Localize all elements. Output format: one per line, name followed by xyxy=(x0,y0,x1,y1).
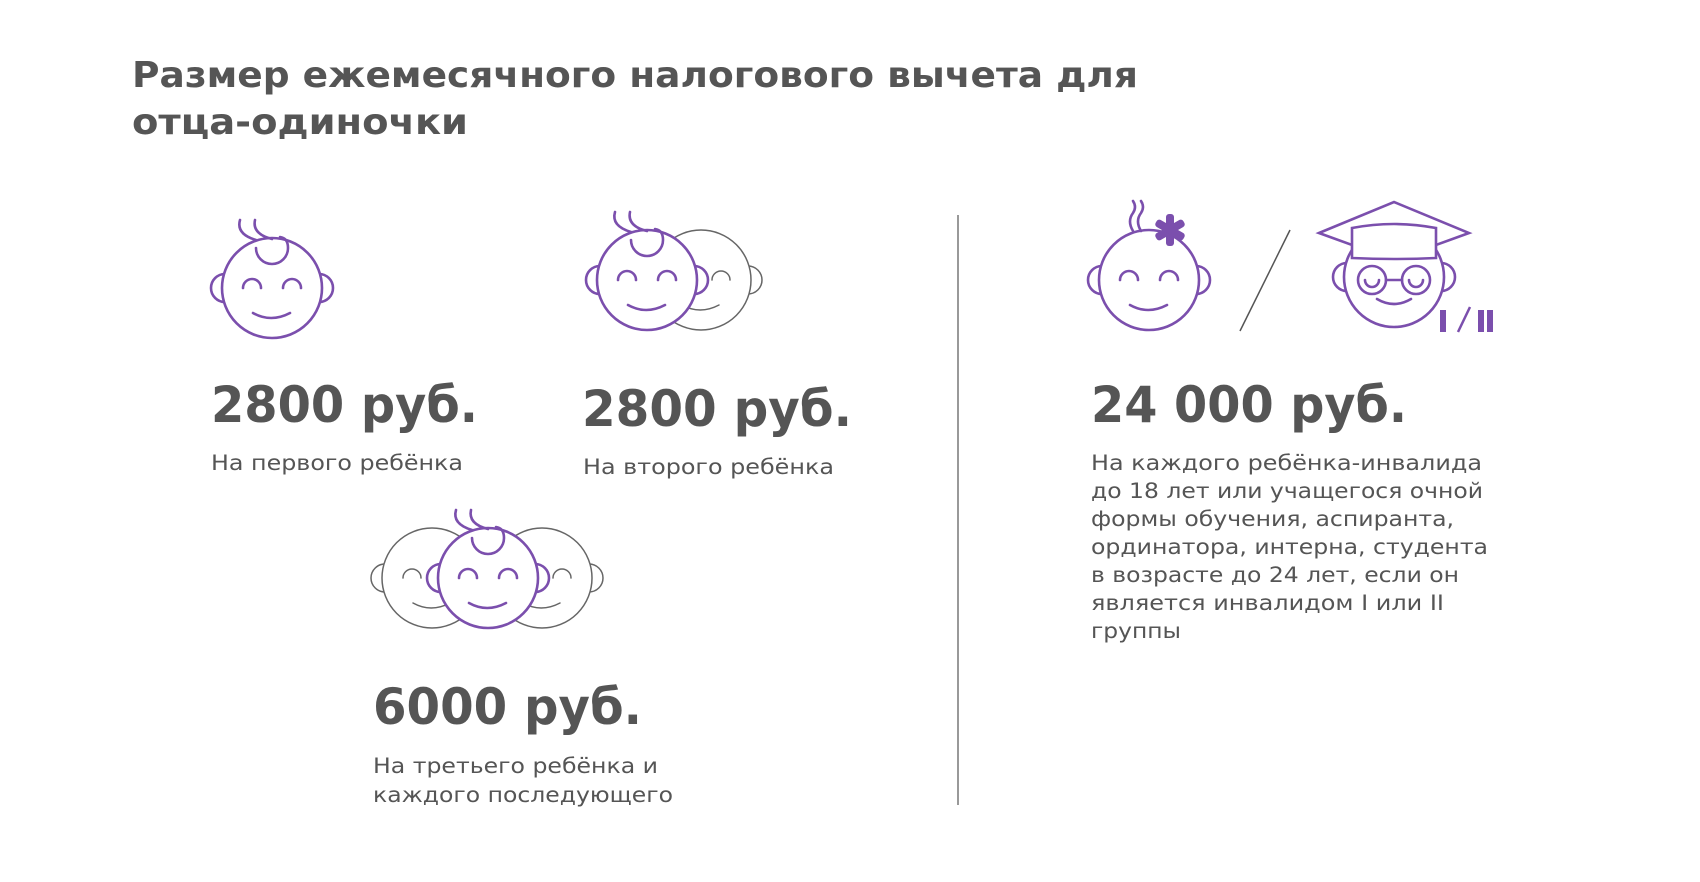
caption: third child: На третьего ребёнка и xyxy=(373,754,658,778)
amount: second child: 2800 руб. xyxy=(582,380,852,438)
amount: disabled child: 24 000 руб. xyxy=(1091,376,1407,434)
amount: first child: 2800 руб. xyxy=(211,376,478,434)
title: отца-одиночки xyxy=(132,102,468,143)
caption: disabled child: ординатора, интерна, студента xyxy=(1091,535,1488,559)
caption: second child: На второго ребёнка xyxy=(583,455,834,479)
title: Размер ежемесячного налогового вычета для xyxy=(132,55,1138,96)
icon: student with graduation cap xyxy=(1319,202,1469,327)
icon: slash separator xyxy=(1240,230,1290,331)
caption: disabled child: является инвалидом I или II xyxy=(1091,591,1444,615)
caption: disabled child: в возрасте до 24 лет, если он xyxy=(1091,563,1459,587)
panel: first child xyxy=(211,220,478,475)
icon: two babies xyxy=(586,212,762,330)
icon: baby face xyxy=(211,220,333,338)
caption: disabled child: На каждого ребёнка-инвалида xyxy=(1091,451,1482,475)
caption: disabled child: формы обучения, аспиранта, xyxy=(1091,507,1454,531)
amount: third child: 6000 руб. xyxy=(373,678,642,736)
caption: disabled child xyxy=(1091,451,1488,643)
icon: group I / II xyxy=(1440,307,1493,332)
icon: three babies xyxy=(371,510,603,628)
panel: third child xyxy=(371,510,673,807)
caption: third child: каждого последующего xyxy=(373,783,673,807)
icon: baby girl with flower xyxy=(1088,201,1210,330)
caption: disabled child: до 18 лет или учащегося очной xyxy=(1091,479,1483,503)
caption: disabled child: группы xyxy=(1091,619,1181,643)
caption: third child xyxy=(373,754,673,807)
caption: first child: На первого ребёнка xyxy=(211,451,463,475)
panel: second child xyxy=(582,212,852,479)
title xyxy=(132,55,1138,143)
panel: disabled child xyxy=(1088,201,1493,643)
